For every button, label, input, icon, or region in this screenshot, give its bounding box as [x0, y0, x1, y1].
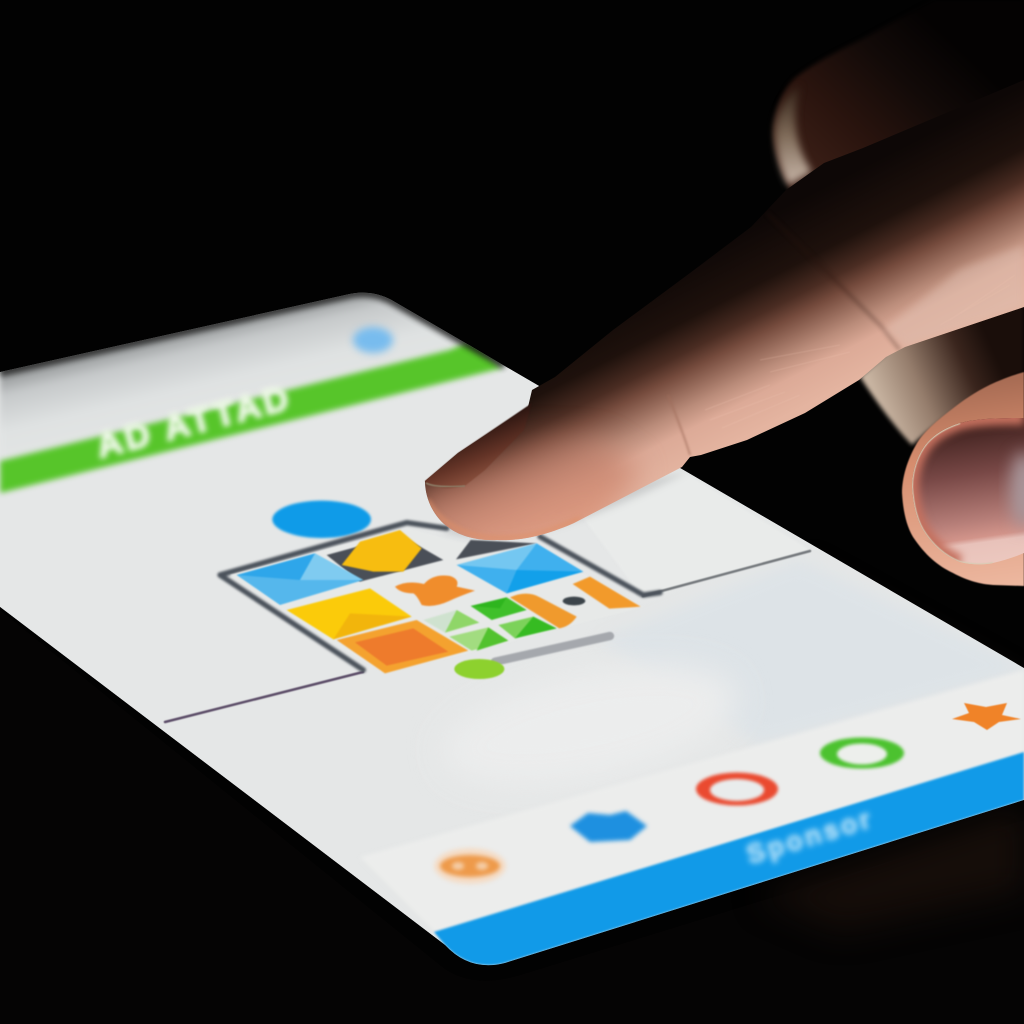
thumb [900, 372, 1024, 586]
orange square tile [337, 620, 468, 673]
dark frame outline [220, 523, 660, 670]
header bar [0, 292, 478, 428]
bottom toolbar strip [432, 673, 1022, 886]
fingertip warm light [415, 430, 640, 560]
blue tile left [237, 553, 363, 605]
middle finger behind (upper) [773, 0, 1024, 190]
lower finger behind [860, 300, 1024, 445]
dark dot [563, 597, 585, 605]
green bar title: AD ATTAD [92, 378, 296, 466]
phone screen [0, 293, 1024, 965]
upper right content panel [555, 470, 810, 597]
rim light on middle finger [775, 86, 812, 185]
lower right tinted panel [906, 599, 1024, 668]
blue tile right [457, 543, 583, 593]
dark triangle above blue tile [456, 540, 537, 559]
green tile group [423, 597, 557, 651]
app icon grid [220, 501, 660, 679]
fingernail [425, 403, 532, 488]
soft light blob [645, 668, 730, 716]
orange bar right [573, 577, 641, 609]
toolbar icon: orange star [952, 703, 1021, 730]
phone body and bezel [0, 555, 1024, 1024]
index finger [415, 80, 1024, 560]
toolbar icon: green ring [820, 738, 904, 768]
toolbar icon: blue shape [570, 811, 647, 842]
grey slider track [495, 636, 610, 662]
nail free edge [426, 483, 465, 487]
blue circle [272, 501, 371, 538]
soft far edge falloff [0, 293, 505, 372]
green slider knob [454, 659, 504, 679]
header icon: blurred blue badge [353, 327, 393, 353]
toolbar icon: red ring [696, 772, 778, 806]
first joint crease [668, 395, 690, 455]
green title bar [0, 340, 502, 493]
skin ridges [705, 275, 1015, 428]
lit pad past the knuckle [885, 245, 1024, 347]
toolbar icon: orange badge [434, 848, 506, 884]
yellow diamond [342, 530, 422, 572]
knuckle crease [767, 213, 900, 350]
yellow tile [287, 588, 412, 639]
blue bar label: Sponsor [743, 803, 877, 870]
orange rounded bar [510, 594, 577, 628]
finger shadow on screen [440, 470, 690, 538]
thumb nail [912, 418, 1024, 564]
white grid backing [230, 548, 332, 576]
blue bottom bar [434, 752, 1024, 965]
tip lower edge glow [428, 500, 580, 538]
orange butterfly shape [395, 575, 475, 606]
panel divider lines [165, 551, 810, 722]
dark tile behind yellow diamond [326, 542, 444, 582]
